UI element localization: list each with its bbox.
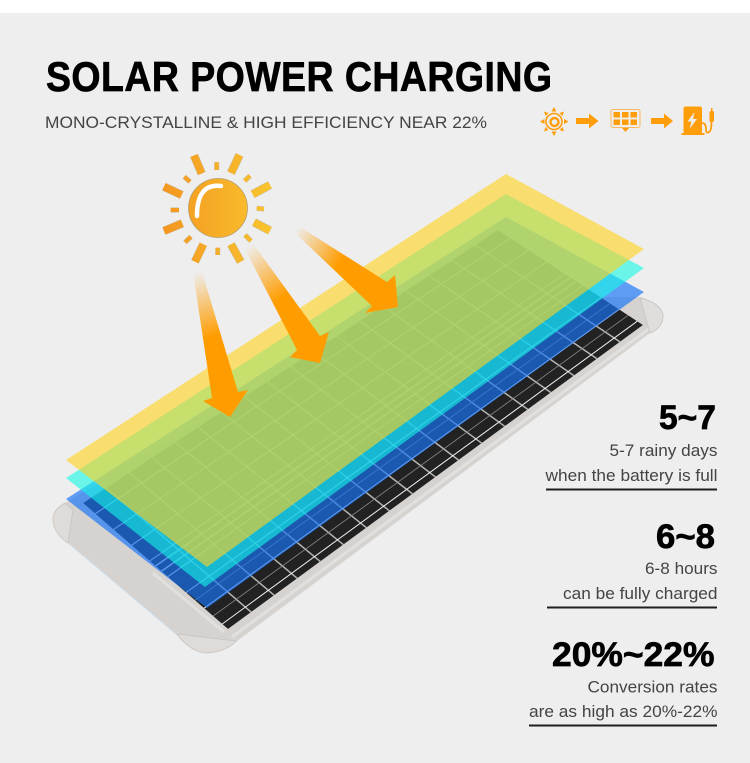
stat description line two: are as high as 20%-22% [529,702,718,721]
arrow: middle sun ray [245,245,329,363]
lamp body [53,297,663,653]
stat description line two: can be fully charged [563,584,718,603]
stat value: 20%~22% [552,636,714,674]
icon: charging station [682,106,714,135]
icon: arrow two [651,114,673,128]
cell grid cross lines [124,306,620,612]
sun [164,155,270,262]
arrow: right sun ray [293,227,398,313]
left end cap [53,503,73,543]
icon row: sun to panel to charger [540,106,714,136]
stat value: 6~8 [656,518,715,556]
subtitle: MONO-CRYSTALLINE & HIGH EFFICIENCY NEAR 22% [45,113,487,132]
cell grid center band [156,278,576,572]
stat underline [547,606,717,608]
bottom end cap [177,634,236,653]
stat description line one: 5-7 rainy days [610,441,718,460]
arrow: left sun ray [193,272,248,417]
stat description line one: 6-8 hours [645,559,718,578]
icon: small solar panel [611,110,640,132]
lamp outer edge [68,543,177,635]
right end cap [640,298,663,333]
stat description line two: when the battery is full [544,466,718,485]
stat description line one: Conversion rates [588,678,718,696]
solar cells [83,230,643,629]
stat: charging hours [547,518,718,608]
lamp rim highlight [153,328,650,637]
icon: arrow one [576,114,598,128]
translucent layer: yellow [66,174,644,567]
cell grid thin long lines [195,303,628,616]
icon: small sun [540,107,568,136]
stat: conversion rates [529,636,718,726]
sun rays [164,155,270,262]
stat underline [546,488,717,490]
cell grid bright long lines [95,238,637,624]
sun rays outline [164,155,270,262]
sun highlight [197,186,221,216]
solar lamp [53,230,663,653]
stat: rainy days [544,399,718,490]
translucent layer: blue [66,217,644,608]
stat underline [529,724,717,726]
sun disc [188,178,248,238]
title: SOLAR POWER CHARGING [46,54,552,100]
translucent layer: cyan [66,194,644,587]
stat value: 5~7 [659,399,716,437]
